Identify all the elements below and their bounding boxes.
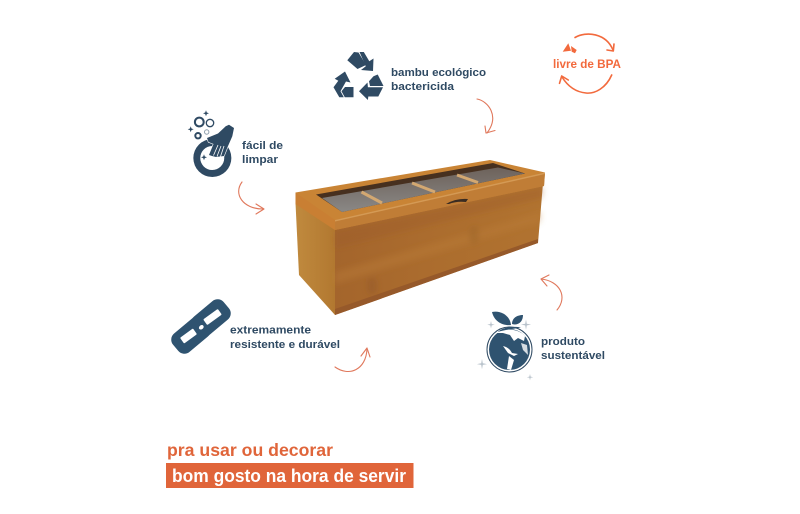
arrow: recycle to box	[477, 99, 495, 133]
heading: pra usar ou decorar: pra usar ou decorar	[167, 440, 333, 460]
text: produto sustentavel: produto	[541, 336, 585, 348]
text: produto sustentavel: sustentável	[541, 350, 605, 362]
text: extremamente resistente: resistente e durável	[230, 339, 340, 351]
lid clasp	[446, 199, 468, 204]
icon: chain	[168, 296, 234, 357]
product: bamboo box	[296, 160, 545, 315]
banner: bom gosto: bom gosto na hora de servir	[172, 466, 406, 486]
text: facil de limpar: fácil de	[242, 140, 283, 152]
box lid	[296, 160, 545, 230]
text: extremamente resistente: extremamente	[230, 324, 311, 336]
text: bambu ecologico: bactericida	[391, 81, 455, 93]
box front	[335, 183, 543, 315]
icon: clean hand	[188, 110, 234, 177]
lid window	[316, 163, 525, 212]
icon: globe with leaves	[477, 312, 533, 380]
arrow: clean to box	[239, 182, 264, 214]
arrow: chain to box	[335, 348, 370, 371]
badge: livre de BPA	[553, 34, 621, 93]
box side	[296, 203, 335, 315]
icon: recycle	[334, 52, 384, 100]
text: facil de limpar: limpar	[242, 154, 279, 166]
badge: livre de BPA: livre de BPA	[553, 59, 621, 71]
arrow: globe to box	[541, 275, 562, 310]
text: bambu ecologico: bambu ecológico	[391, 67, 486, 79]
